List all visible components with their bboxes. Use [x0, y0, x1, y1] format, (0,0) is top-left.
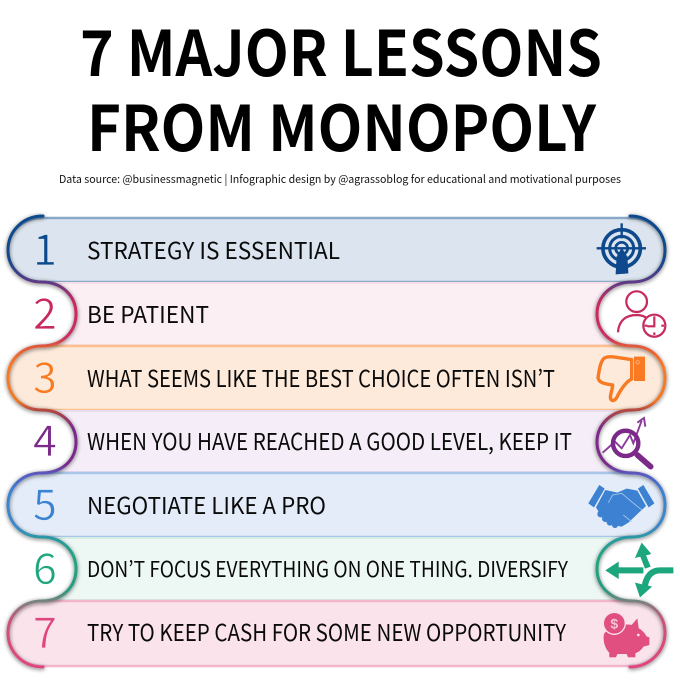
- title: 7 MAJOR LESSONS: [80, 4, 602, 95]
- title: FROM MONOPOLY: [87, 79, 596, 170]
- row 3: 3: [33, 344, 57, 406]
- row 4: 4: [33, 407, 57, 469]
- row 4: WHEN YOU HAVE REACHED A GOOD LEVEL, KEEP IT: [87, 423, 572, 457]
- icon: person with clock: [618, 291, 665, 337]
- row 5: 5: [33, 471, 57, 533]
- row 3: [33, 344, 555, 406]
- source credit line: Data source: @businessmagnetic | Infographic design by @agrassoblog for educational and motivational purposes: [59, 171, 621, 187]
- row 6: 6: [33, 535, 57, 597]
- row 1: STRATEGY IS ESSENTIAL: [87, 232, 340, 266]
- icon: magnifier over rising chart: [603, 418, 651, 467]
- left serpentine edge: [8, 216, 76, 667]
- row 1: [33, 216, 340, 278]
- row 5: [33, 471, 326, 533]
- row 6: DON’T FOCUS EVERYTHING ON ONE THING. DIVERSIFY: [87, 553, 569, 584]
- icon: target with tower: [597, 223, 646, 274]
- row 7: [33, 599, 566, 661]
- row 3: WHAT SEEMS LIKE THE BEST CHOICE OFTEN ISN’T: [87, 360, 555, 394]
- row 2: 2: [33, 280, 57, 342]
- title: [80, 4, 602, 170]
- icon: handshake: [588, 485, 654, 528]
- icon: piggy bank with coin: $: [610, 615, 618, 631]
- row 7: 7: [33, 599, 57, 661]
- row 6: [33, 535, 569, 597]
- row 2: BE PATIENT: [87, 296, 209, 330]
- row 7: TRY TO KEEP CASH FOR SOME NEW OPPORTUNITY: [87, 614, 566, 648]
- row 2: [33, 280, 209, 342]
- row 4: [33, 407, 572, 469]
- band backgrounds: [8, 218, 665, 666]
- row 5: NEGOTIATE LIKE A PRO: [87, 487, 326, 521]
- right serpentine edge: [597, 216, 665, 667]
- icon: diverging arrows: [605, 543, 673, 597]
- icon: piggy bank with coin: [603, 612, 649, 657]
- icon: thumbs down: [598, 357, 645, 401]
- row 1: 1: [33, 216, 57, 278]
